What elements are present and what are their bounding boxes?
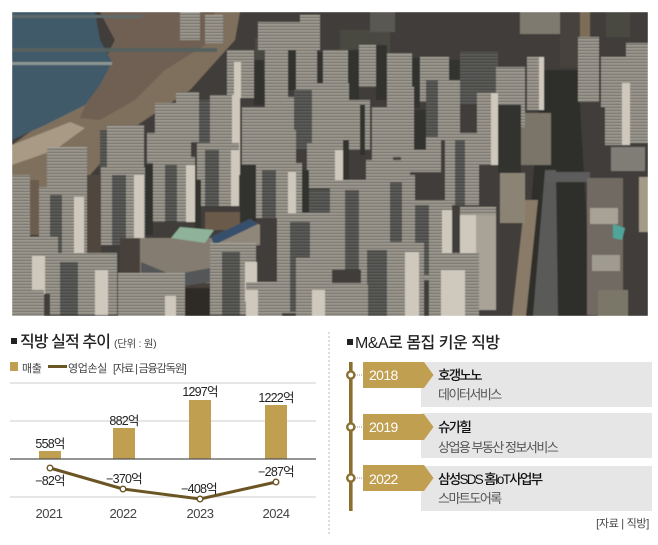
heading: M&A: M&A로 몸집 키운 직방 xyxy=(355,334,500,352)
revenue labels: 558억 xyxy=(35,437,65,451)
revenue labels: 1222억 xyxy=(258,391,294,405)
bar chart: revenue xyxy=(39,400,287,459)
operating loss labels: −370억 xyxy=(106,472,142,486)
riverside land xyxy=(12,12,240,200)
item: 2022: 2022 xyxy=(369,471,399,487)
year axis labels: 2021 xyxy=(36,506,63,521)
revenue labels: 1297억 xyxy=(182,385,218,399)
year axis labels: 2023 xyxy=(187,506,214,521)
low-rise school with green and blue roofs xyxy=(120,238,141,246)
year axis labels xyxy=(36,506,290,521)
item: 2019 xyxy=(347,413,652,458)
right side low buildings xyxy=(587,178,623,315)
item: 2019: 슈가힐 xyxy=(438,419,471,435)
panel: M&A timeline xyxy=(347,334,652,530)
item: 2019: 상업용 부동산 정보서비스 xyxy=(438,440,559,455)
road xyxy=(522,70,592,316)
heading: performance trend: 직방 실적 추이 xyxy=(20,333,110,351)
item: 2018: 2018 xyxy=(369,367,399,383)
vertical dashed divider xyxy=(328,332,330,534)
item: 2022 xyxy=(347,465,652,511)
apartment blocks: middle rows xyxy=(154,102,176,134)
zero axis xyxy=(10,458,316,460)
legend: [자료 | 금융감독원] xyxy=(113,362,187,375)
shadows between middle rows xyxy=(145,105,521,235)
item: 2022: 삼성SDS 홈IoT사업부 xyxy=(438,471,543,487)
item: 2019: 2019 xyxy=(369,419,399,435)
photo: aerial view of apartment complexes beside a river xyxy=(12,12,648,316)
panel: performance trend chart xyxy=(10,333,316,521)
river xyxy=(12,12,112,140)
operating loss labels xyxy=(35,465,294,496)
heading: performance trend: (단위 : 원) xyxy=(114,337,156,350)
gridlines xyxy=(10,383,316,497)
heading: performance trend xyxy=(11,333,156,351)
legend: 매출 xyxy=(22,362,42,375)
item: 2018 xyxy=(347,362,652,407)
legend: 영업손실 xyxy=(68,362,107,375)
item: 2018: 호갱노노 xyxy=(438,368,482,383)
legend xyxy=(10,362,187,375)
year axis labels: 2022 xyxy=(110,506,137,521)
operating loss labels: −408억 xyxy=(181,482,217,496)
timeline spine xyxy=(349,362,353,511)
item: 2018: 데이터서비스 xyxy=(438,387,502,402)
revenue labels: 882억 xyxy=(109,414,139,428)
source note: [자료 | 직방] xyxy=(596,517,649,530)
revenue labels xyxy=(35,385,294,451)
shadows between back rows xyxy=(254,45,460,108)
apartment blocks: back rows xyxy=(256,38,264,60)
apartment blocks: front rows xyxy=(12,237,58,294)
operating loss labels: −287억 xyxy=(258,465,294,479)
line chart: operating loss xyxy=(47,465,279,502)
operating loss labels: −82억 xyxy=(35,474,65,488)
year axis labels: 2024 xyxy=(263,506,290,521)
item: 2022: 스마트도어록 xyxy=(438,491,502,506)
